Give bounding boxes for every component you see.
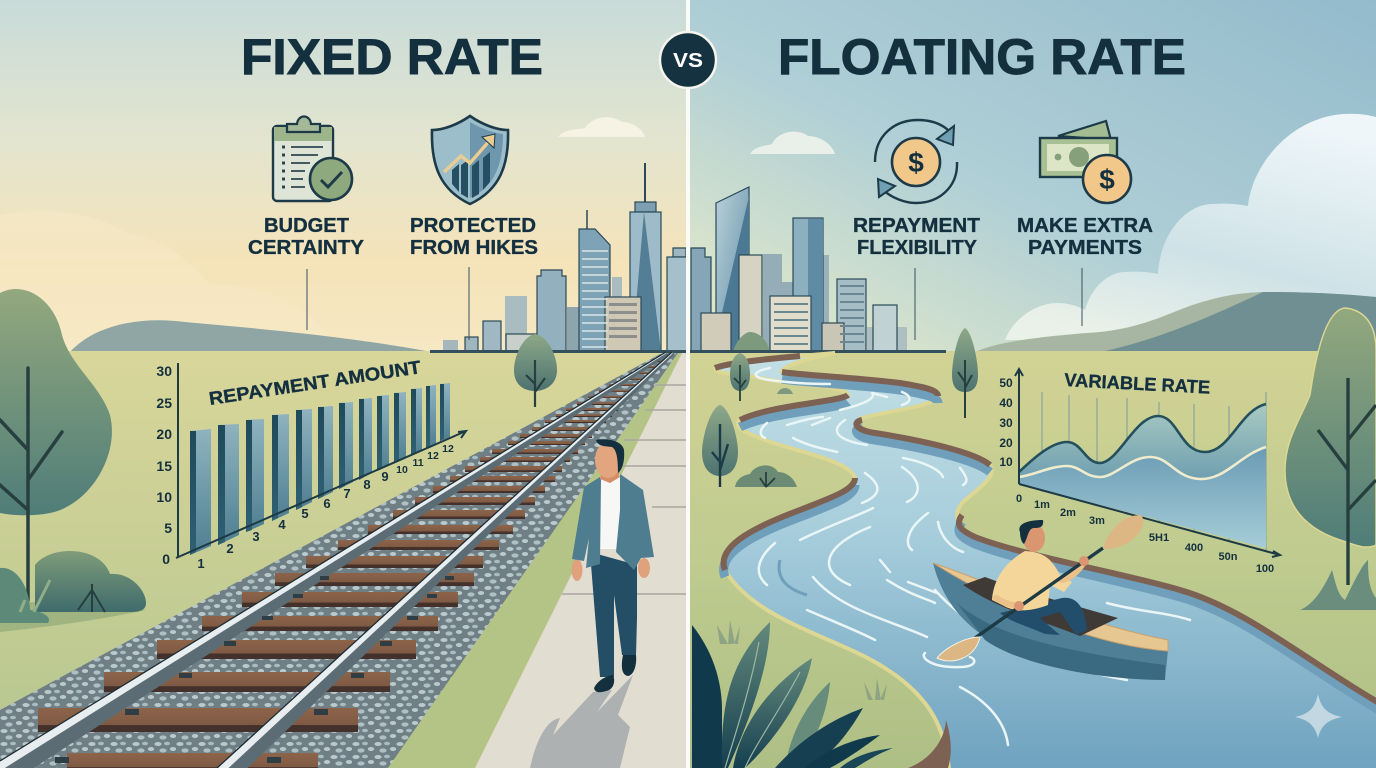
river brown banks [715, 356, 1376, 715]
x axis labels: 11 [412, 457, 424, 469]
x axis labels: 2m [1060, 507, 1076, 519]
green strip beside gravel [388, 353, 687, 768]
upper rate line [1019, 404, 1266, 472]
icon: extra payments cash and coin [1040, 121, 1131, 203]
leader line [306, 269, 308, 330]
leader line [1081, 268, 1083, 326]
river bank water shadow [724, 379, 1376, 722]
x axis labels: 400 [1185, 542, 1203, 554]
label: protected from hikes: PROTECTED [410, 215, 536, 237]
chart title: VARIABLE RATE [1064, 369, 1211, 398]
x axis labels [1016, 493, 1274, 575]
darker water swirl [779, 560, 807, 595]
hair [1019, 520, 1043, 544]
grass tufts [717, 620, 887, 700]
hands [572, 559, 582, 581]
heading: floating rate: FLOATING RATE [778, 29, 1186, 85]
y axis labels: 50 [999, 376, 1013, 390]
leader line [468, 267, 470, 340]
x axis labels: 50n [1219, 551, 1238, 563]
left small cloud [558, 117, 645, 137]
gravel bed [0, 353, 678, 768]
label: protected from hikes: FROM HIKES [410, 237, 538, 259]
lower rate line [1019, 447, 1266, 479]
right sky [690, 0, 1376, 352]
y axis labels: 5 [164, 520, 172, 536]
x axis labels: 9 [381, 469, 389, 484]
x axis labels: 2 [226, 541, 234, 556]
foreground foliage [692, 622, 893, 768]
big cumulus cloud [1005, 114, 1376, 340]
label: repayment flexibility: REPAYMENT [853, 215, 980, 237]
y axis labels: 10 [999, 455, 1013, 469]
grass beside right tree [1300, 560, 1376, 610]
heading: fixed rate: FIXED RATE [241, 29, 543, 85]
x axis labels: 4 [278, 517, 286, 532]
left ground [0, 351, 687, 768]
panel: fixed rate scene [0, 0, 687, 768]
cockpit [963, 577, 1118, 636]
small far bush [777, 388, 793, 394]
x axis labels: 6 [323, 496, 331, 511]
y axis labels: 30 [156, 363, 172, 379]
x axis labels: 12 [427, 450, 439, 462]
tree beside city [952, 328, 978, 418]
darker right hill [1100, 292, 1376, 352]
icon: budget certainty clipboard [273, 116, 352, 201]
chart: variable rate [999, 369, 1280, 575]
skyscraper window stripes [582, 250, 608, 348]
chart axes [176, 363, 466, 558]
x axis labels: 5H1 [1149, 532, 1169, 544]
lower area [1019, 447, 1266, 548]
label: budget certainty: CERTAINTY [248, 237, 365, 259]
label: budget certainty: BUDGET [264, 215, 349, 237]
x axis labels: 7 [343, 486, 351, 501]
fixed-rate left tree [0, 289, 112, 600]
panel: floating rate scene [690, 0, 1376, 768]
person in kayak [933, 515, 1168, 680]
tree left bank [702, 405, 738, 487]
y axis labels: 20 [999, 436, 1013, 450]
x axis labels: 12 [442, 443, 454, 455]
bush by city [733, 332, 770, 352]
right ground [690, 351, 1376, 768]
y axis labels: 10 [156, 489, 172, 505]
vertical grid [1042, 392, 1266, 552]
small tree far bank [730, 353, 750, 401]
walker shadow [530, 675, 633, 768]
x axis labels: 1m [1034, 499, 1050, 511]
left city skyline [443, 163, 687, 352]
y axis labels [156, 363, 172, 567]
left horizon haze clouds [0, 210, 340, 352]
icon: repayment flexibility cycle [875, 120, 957, 203]
right hills [975, 292, 1376, 352]
left sky [0, 0, 687, 352]
sparkle mark [1295, 694, 1342, 738]
footpath [475, 353, 687, 768]
arms [996, 562, 1084, 606]
hair [596, 439, 624, 473]
y axis labels: 15 [156, 458, 172, 474]
cream building windows [609, 303, 637, 338]
kayak deck [933, 563, 1168, 651]
label: budget certainty [248, 215, 365, 259]
bush under left tree [0, 551, 146, 632]
railway sleepers [38, 360, 664, 768]
label: repayment flexibility: FLEXIBILITY [857, 237, 978, 259]
bars [190, 383, 450, 555]
label: make extra payments [1017, 215, 1153, 259]
upper area [1019, 404, 1266, 479]
chart title: REPAYMENT AMOUNT [207, 356, 423, 409]
legs [1000, 598, 1087, 635]
building stripes [774, 285, 864, 345]
icon: extra payments cash and coin: $ [1099, 164, 1115, 195]
shoes [594, 675, 614, 692]
x axis labels: 10 [396, 464, 408, 476]
x axis labels: 8 [363, 477, 371, 492]
railway rails [0, 352, 675, 768]
right city skyline [691, 187, 907, 352]
y axis labels: 30 [999, 416, 1013, 430]
torso [992, 551, 1072, 610]
centre divider [686, 0, 690, 768]
label: repayment flexibility [853, 215, 980, 259]
x axis labels: 100 [1256, 563, 1274, 575]
person walking on path [530, 439, 654, 768]
y axis labels: 40 [999, 396, 1013, 410]
right small cloud [750, 132, 835, 154]
small tree on far field [514, 334, 557, 407]
x axis labels: 3 [252, 529, 260, 544]
y axis labels: 20 [156, 426, 172, 442]
label: make extra payments: PAYMENTS [1028, 237, 1142, 259]
label: make extra payments: MAKE EXTRA [1017, 215, 1153, 237]
water highlights [756, 368, 1190, 745]
x axis labels: 3m [1089, 515, 1105, 527]
neck [600, 470, 620, 483]
chart axes [1015, 369, 1280, 557]
kayak hull [933, 563, 1168, 680]
y axis labels: 0 [162, 551, 170, 567]
right horizon line [690, 350, 946, 353]
label: protected from hikes [410, 215, 538, 259]
leader line [914, 268, 916, 340]
right tree [1285, 308, 1376, 585]
legs [590, 552, 637, 677]
x axis labels [197, 443, 454, 571]
x axis labels: 0 [1016, 493, 1022, 505]
left hills [70, 320, 432, 352]
jacket [572, 474, 654, 570]
shirt [600, 474, 620, 549]
icon: repayment flexibility cycle: $ [908, 147, 924, 178]
winding river [715, 353, 1376, 768]
paddle [937, 515, 1143, 661]
head [595, 442, 621, 478]
y axis labels [999, 376, 1013, 469]
y axis labels: 25 [156, 395, 172, 411]
head [1023, 524, 1045, 552]
icon: protected from hikes shield [432, 116, 508, 204]
vs badge [660, 32, 716, 88]
chart: repayment amount bars [156, 356, 466, 571]
near-bank brown edge [908, 720, 951, 768]
x axis labels: 5 [301, 506, 309, 521]
bush on left bank [735, 465, 797, 487]
hands [1079, 556, 1089, 566]
left horizon line [430, 350, 687, 353]
x axis labels: 1 [197, 556, 205, 571]
vs badge: VS [673, 50, 703, 72]
